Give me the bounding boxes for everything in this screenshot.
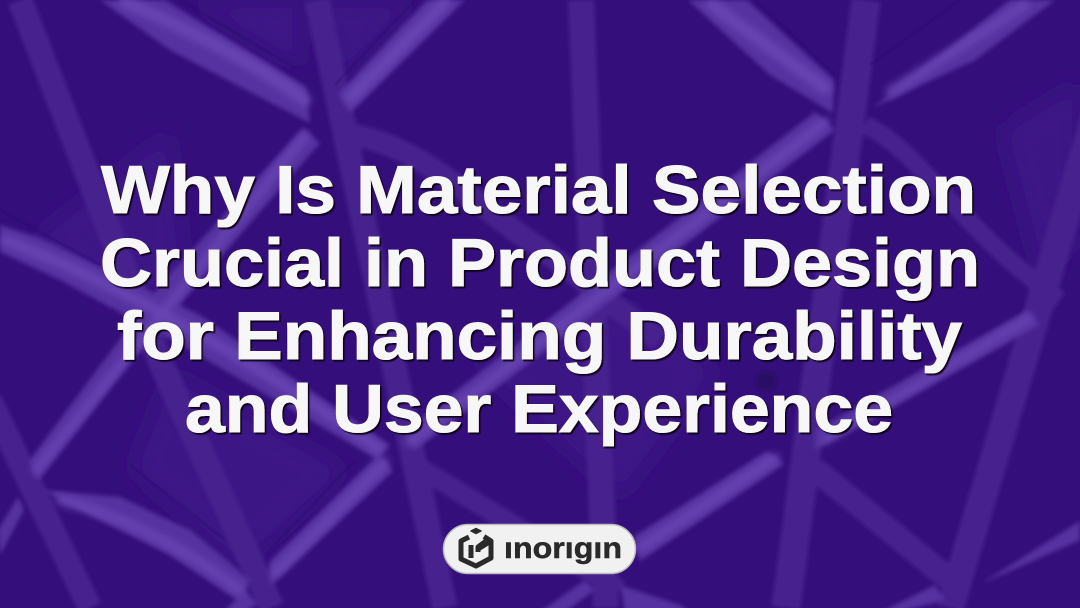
title bbox=[100, 152, 980, 447]
title: for Enhancing Durability bbox=[117, 298, 962, 374]
title: and User Experience bbox=[185, 371, 893, 447]
logo badge bbox=[444, 524, 636, 574]
icon: inorigin hexagonal cube bbox=[461, 528, 491, 566]
title: Crucial in Product Design bbox=[100, 225, 980, 301]
logo wordmark: inorigin bbox=[504, 532, 622, 565]
title: Why Is Material Selection bbox=[101, 152, 976, 228]
